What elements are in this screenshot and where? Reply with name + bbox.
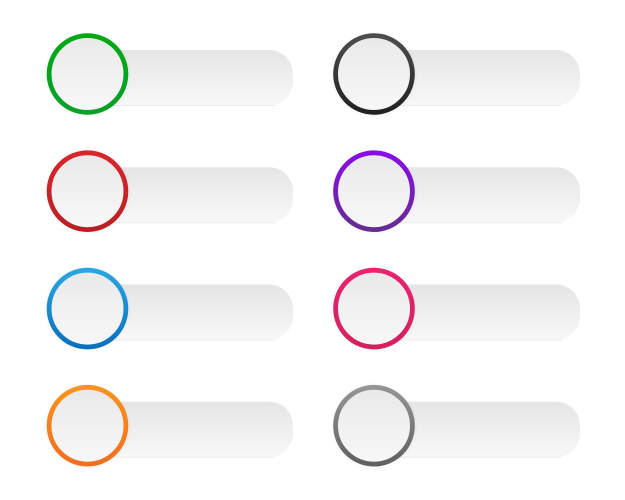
button: dark gray (333, 34, 580, 116)
button: purple (333, 151, 580, 233)
button: blue (46, 268, 293, 350)
button: light gray (333, 385, 580, 467)
button: orange (46, 385, 293, 467)
button: pink (333, 268, 580, 350)
button: red (46, 151, 293, 233)
button: green (46, 34, 293, 116)
